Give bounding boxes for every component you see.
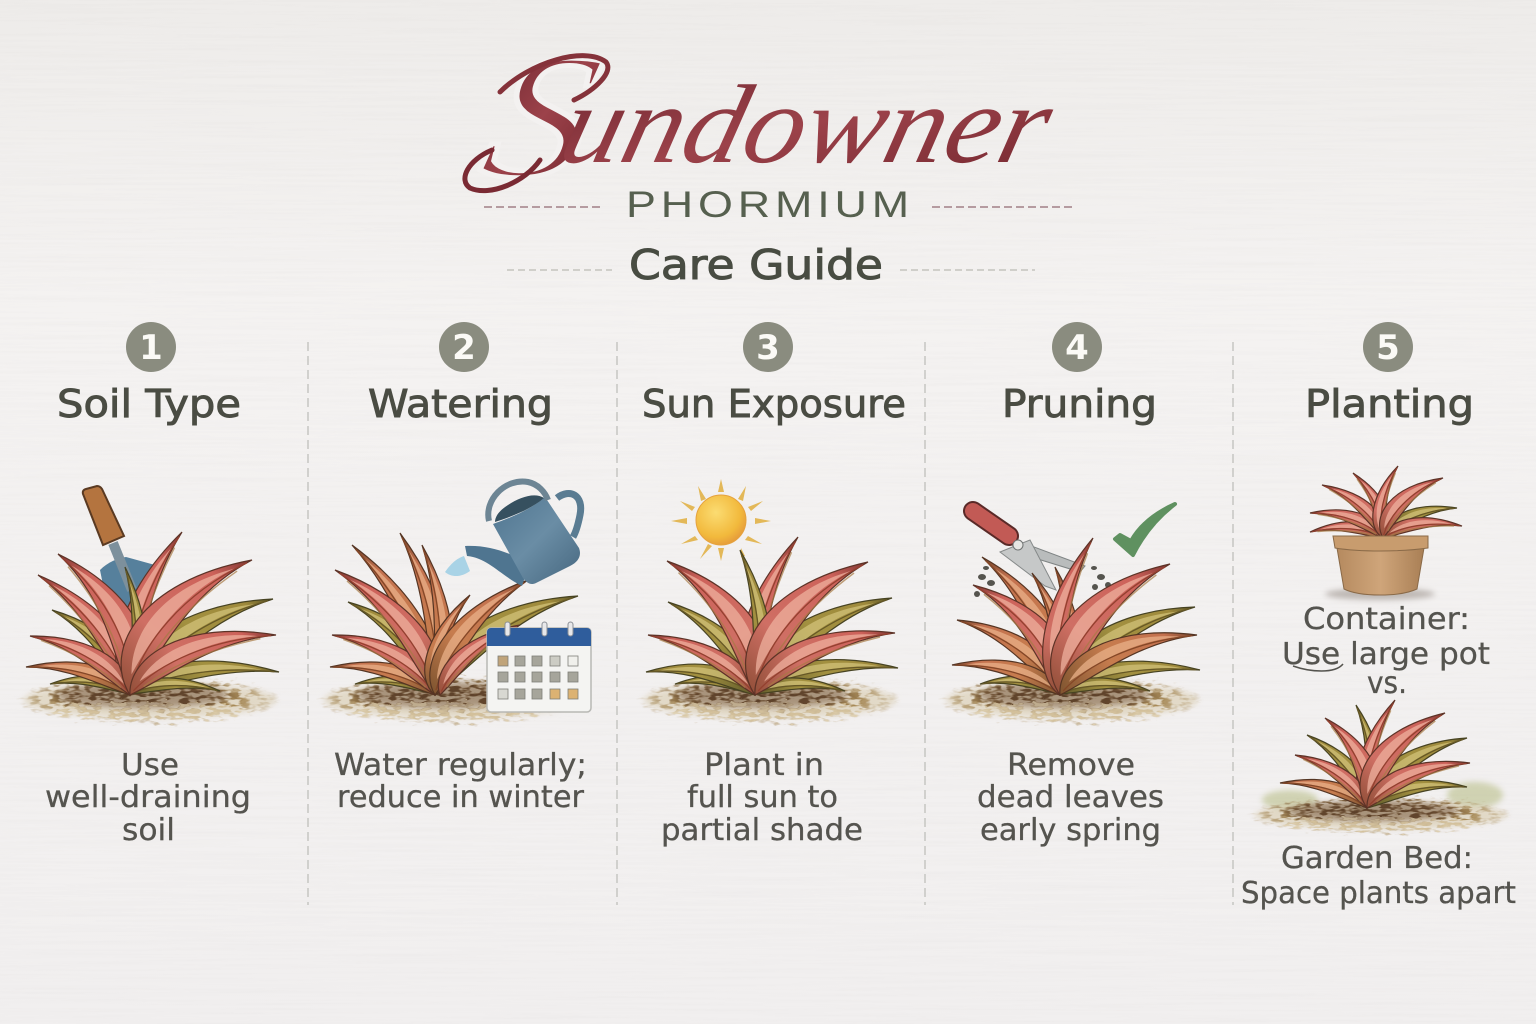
number badge 1 [126,322,176,372]
text: pruning instruction: early spring [980,813,1161,848]
number badge 3 [743,322,793,372]
number badge 4: 4 [1065,328,1089,368]
number badge 1: 1 [139,328,163,368]
text: container instruction: Use large pot [1282,637,1490,672]
icon: calendar [487,622,591,712]
text: container instruction [1282,602,1490,701]
illustration: phormium plant in soil [638,530,902,724]
text: pruning instruction: Remove [1007,748,1135,783]
panel: soil type [18,322,282,848]
number badge 5 [1363,322,1413,372]
icon: watering can [445,482,581,586]
heading: Soil Type: Soil Type [57,382,241,426]
illustration: phormium plant in soil [940,532,1204,724]
icon: sun [671,479,771,561]
title: Sundowner [465,18,1066,215]
text: soil instruction [45,748,251,848]
text: soil instruction: soil [122,813,175,848]
text: pruning instruction: dead leaves [977,780,1164,815]
number badge 5: 5 [1376,328,1400,368]
illustration: phormium plant in soil [18,523,282,724]
text: pruning instruction [977,748,1164,848]
text: soil instruction: Use [121,748,179,783]
heading: Sun Exposure: Sun Exposure [642,382,906,426]
text: watering instruction: reduce in winter [337,780,585,815]
panel: sun exposure [638,322,906,848]
panel: watering [318,322,591,815]
icon: trimmed leaf debris [974,566,1111,597]
text: watering instruction: Water regularly; [334,748,587,783]
heading: Care Guide with dashes: Care Guide [629,241,883,289]
illustration: garden bed phormium [1249,694,1513,834]
icon: check mark [1115,504,1175,555]
number badge 2 [439,322,489,372]
text: sun instruction: partial shade [661,813,863,848]
heading: Pruning: Pruning [1002,382,1157,426]
icon: garden trowel [83,486,155,640]
illustration: potted phormium [1310,463,1462,600]
subtitle: Phormium with dashes: PHORMIUM [626,184,914,225]
number badge 4 [1052,322,1102,372]
text: sun instruction: Plant in [704,748,824,783]
number badge 3: 3 [756,328,780,368]
text: garden bed instruction: Garden Bed: [1281,841,1473,876]
title: Sundowner: undowner [550,63,1066,187]
title: Sundowner: S [466,18,618,215]
text: watering instruction [334,748,587,815]
text: container instruction: Container: [1303,602,1470,637]
panel: planting [1241,322,1516,911]
text: container instruction: vs. [1367,666,1407,701]
text: soil instruction: well-draining [45,780,251,815]
icon: pruning shears [973,511,1085,590]
heading: Watering: Watering [368,382,553,426]
title block [465,18,1075,289]
heading: Planting: Planting [1305,382,1474,426]
panel: pruning [940,322,1204,848]
text: sun instruction: full sun to [687,780,838,815]
text: garden bed instruction [1241,841,1516,911]
text: garden bed instruction: Space plants apart [1241,876,1516,911]
illustration: phormium plant in soil [318,528,582,724]
text: sun instruction [661,748,863,848]
number badge 2: 2 [452,328,476,368]
